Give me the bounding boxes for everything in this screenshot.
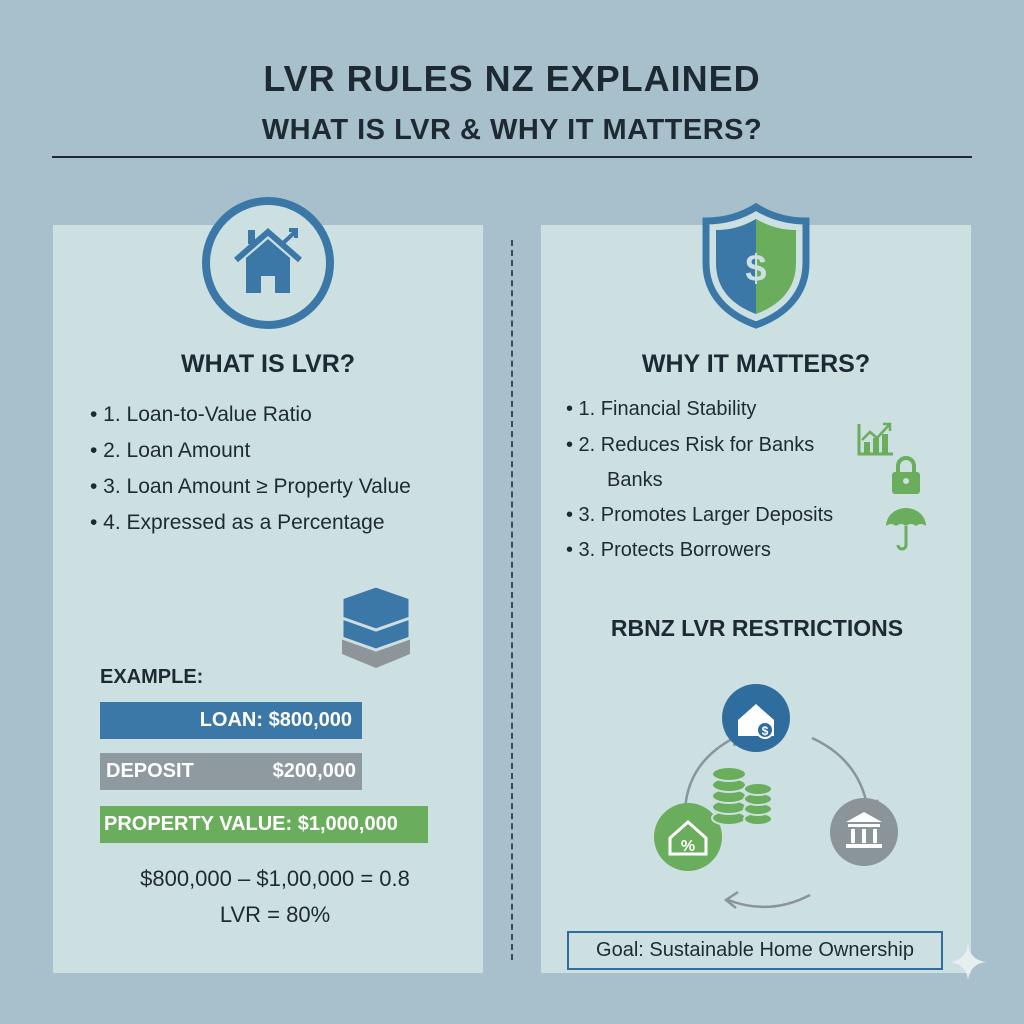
bar: loan: LOAN: $800,000: [200, 709, 352, 731]
list: reasons: Banks: [607, 469, 663, 491]
bar: deposit: [100, 753, 362, 790]
bar: property value: [100, 806, 428, 843]
title: [262, 58, 762, 146]
bar: loan: [100, 702, 362, 739]
cycle diagram: [654, 684, 898, 909]
formula: [140, 866, 410, 927]
formula: LVR = 80%: [220, 902, 330, 927]
title: WHAT IS LVR & WHY IT MATTERS?: [262, 114, 762, 146]
icon: growth chart: [858, 422, 893, 456]
callout: goal: Goal: Sustainable Home Ownership: [596, 939, 914, 961]
icon: sparkle: [951, 945, 986, 980]
list: reasons: • 3. Promotes Larger Deposits: [566, 504, 833, 526]
list: LVR definitions: • 2. Loan Amount: [90, 439, 250, 462]
list: reasons: • 1. Financial Stability: [566, 398, 756, 420]
list: reasons: • 2. Reduces Risk for Banks: [566, 434, 814, 456]
bar: deposit: DEPOSIT: [106, 760, 194, 782]
heading: RBNZ restrictions: RBNZ LVR RESTRICTIONS: [611, 615, 903, 641]
list: LVR definitions: • 1. Loan-to-Value Ratio: [90, 403, 312, 426]
icon: house in circle: [202, 197, 334, 329]
panel: why it matters: [541, 225, 971, 973]
callout: goal: [567, 931, 943, 970]
icon: umbrella: [886, 508, 926, 550]
icon: shield: [702, 203, 810, 329]
bar: property value: PROPERTY VALUE: $1,000,000: [104, 813, 398, 835]
list: reasons: [566, 398, 833, 561]
cycle diagram: $: [762, 724, 769, 738]
list: reasons: • 3. Protects Borrowers: [566, 539, 771, 561]
formula: $800,000 – $1,00,000 = 0.8: [140, 866, 410, 891]
list: LVR definitions: • 4. Expressed as a Percentage: [90, 511, 385, 534]
cycle diagram: %: [681, 838, 695, 855]
icon: lock: [892, 456, 920, 494]
heading: what is LVR: WHAT IS LVR?: [181, 350, 355, 378]
list: LVR definitions: • 3. Loan Amount ≥ Property Value: [90, 475, 411, 498]
icon: shield: $: [745, 248, 767, 290]
heading: why it matters: WHY IT MATTERS?: [642, 350, 870, 378]
panel: what is LVR: [53, 225, 483, 973]
title: LVR RULES NZ EXPLAINED: [263, 58, 761, 99]
list: LVR definitions: [90, 403, 411, 534]
bar: deposit: $200,000: [273, 760, 356, 782]
label: example: EXAMPLE:: [100, 666, 203, 688]
icon: layered stack: [342, 588, 410, 668]
